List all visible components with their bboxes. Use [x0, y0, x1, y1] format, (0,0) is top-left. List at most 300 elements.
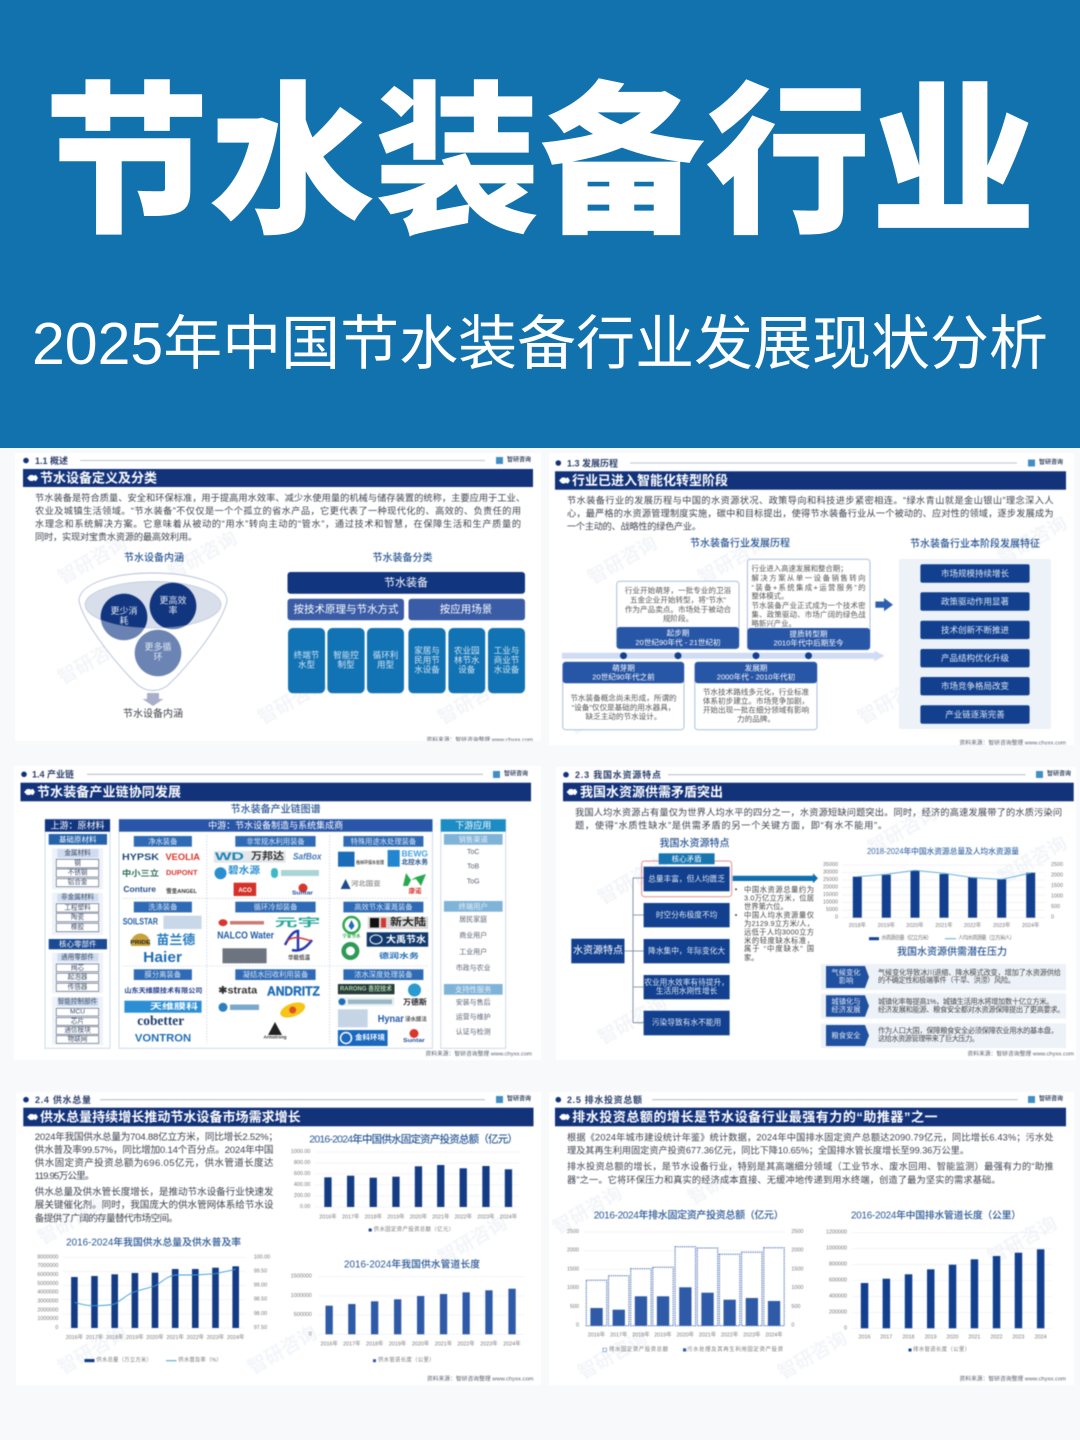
chart: supply volume and rate: 98.50	[254, 1297, 267, 1303]
chart: supply volume and rate: 2019年	[126, 1333, 144, 1341]
callout text: 中国水资源总量约为	[744, 885, 814, 894]
chart: supply volume and rate: 4000000	[37, 1290, 58, 1296]
chart: drainage pipeline length: 排水管道长度（公里）	[913, 1345, 970, 1353]
chart: supply volume and rate: 99.00	[254, 1283, 267, 1289]
chart: supply volume and rate: 1000000	[37, 1316, 58, 1322]
callout text: 3.0万亿立方米，位居	[744, 894, 814, 902]
stage: 起步期: 规阶段。	[663, 613, 693, 623]
column: upstream: 核心零部件	[59, 939, 97, 949]
characteristics tree	[571, 853, 732, 1035]
chart: drainage investment: 0	[576, 1323, 579, 1329]
chart: water resources: 0	[835, 915, 838, 921]
chart: drainage investment: 排水固定资产投资总额	[609, 1345, 669, 1353]
pressure rows: 的不确定性和极端事件（干旱、洪涝）风险。	[878, 976, 1015, 984]
chart: drainage pipeline length: 0	[844, 1325, 847, 1331]
column: upstream: 通用零部件	[61, 952, 94, 961]
chart: water resources: 2019年	[878, 921, 896, 929]
panel: 1.3 development history: 智研咨询	[994, 512, 1071, 569]
features list: 政策驱动作用显著	[941, 596, 1009, 606]
column: upstream: 基础原材料	[59, 834, 97, 844]
classification tree: 智能控	[333, 650, 359, 660]
stage: 萌芽期: 萌芽期	[612, 662, 635, 672]
pressure rows: 影响	[839, 976, 853, 985]
chart: drainage investment: 2020年	[677, 1331, 695, 1339]
sub-categories	[134, 836, 423, 980]
body text: 一个主动的、战略性的绿色产业。	[567, 521, 701, 532]
section label: 2.5 排水投资总额	[567, 1094, 642, 1105]
stage: 提质转型期: 2010年代中后期至今	[773, 638, 844, 648]
company logos: 新大陆	[390, 916, 426, 928]
chart: supply pipeline length: 1500000	[291, 1274, 312, 1280]
chart: supply pipeline length: 2016-2024年我国供水管道长度	[344, 1258, 480, 1270]
chart: drainage investment	[567, 1208, 803, 1353]
chart: drainage pipeline length: 2020	[946, 1334, 958, 1340]
chart: drainage investment: 2019年	[654, 1331, 672, 1339]
company logos: BEWG	[402, 850, 428, 858]
company logos: NALCO Water	[217, 930, 274, 942]
panel: 1.3 development history: 智研咨询	[694, 532, 771, 589]
section label: 2.4 供水总量	[35, 1094, 91, 1105]
funnel diagram: 更少消	[110, 605, 138, 616]
logo	[496, 1095, 531, 1103]
chart: supply volume and rate: 5000000	[37, 1281, 58, 1287]
source: 资料来源：智研咨询整理 www.chyxx.com	[967, 1050, 1074, 1058]
source: 资料来源：智研咨询整理 www.chyxx.com	[426, 736, 533, 744]
column: downstream: ToB	[467, 864, 480, 870]
chart: supply pipeline length	[291, 1258, 524, 1364]
panel: 2.3 water resources	[556, 767, 1076, 1060]
company logos: 雪圣ANGEL	[166, 887, 198, 895]
column: upstream	[45, 819, 110, 1048]
chart: water resources: 2021年	[935, 921, 953, 929]
title bar: 我国水资源供需矛盾突出	[580, 784, 723, 800]
stage: 起步期: 行业开始萌芽，一批专业的卫浴	[625, 585, 732, 595]
chart: supply volume and rate: 2020年	[146, 1333, 164, 1341]
callout text	[735, 885, 815, 962]
section label	[23, 1094, 485, 1105]
company logos: Suntar	[403, 1038, 426, 1044]
company logos: ANDRITZ	[267, 985, 320, 999]
company logos	[122, 850, 429, 1046]
chart: drainage investment: 2022年	[721, 1331, 739, 1339]
chart: water resources: 2022年	[964, 921, 982, 929]
chart: water resources: 2023年	[993, 921, 1011, 929]
company logos: WD	[215, 851, 244, 863]
pressure rows: 作为人口大国，保障粮食安全必须保障农业用水的基本盘，	[878, 1026, 1058, 1035]
company logos: SOILSTAR	[123, 917, 158, 927]
company logos: 河北国亚	[351, 878, 381, 888]
column: downstream: ToC	[467, 849, 479, 856]
column: downstream: 销售渠道	[459, 835, 488, 844]
logo: 智研咨询	[504, 769, 528, 777]
body text: 我国人均水资源占有量仅为世界人均水平的四分之一，水资源短缺问题突出。同时，经济的高速发展带了的水质污染问	[575, 806, 1062, 817]
chart: supply volume and rate: 2016-2024年我国供水总量及供水普及率	[66, 1236, 241, 1248]
title bar: 排水投资总额的增长是节水设备行业最强有力的“助推器”之一	[572, 1110, 938, 1124]
chart: supply volume and rate: 供水总量（万立方米）	[96, 1356, 152, 1364]
body text	[575, 806, 1062, 830]
panel: 2.5 drainage investment: 智研咨询	[984, 1212, 1061, 1269]
classification tree: 设备	[458, 664, 476, 674]
chart: fixed asset investment: 2021年	[432, 1212, 450, 1220]
company logos: 北控水务	[402, 857, 429, 866]
stage: 提质转型期	[747, 559, 870, 650]
column: upstream: 不锈钢	[68, 868, 88, 876]
section label	[556, 458, 1017, 468]
company logos: DUPONT	[166, 868, 198, 877]
title bar	[555, 1108, 1066, 1126]
chart: supply volume and rate: 2018年	[106, 1333, 124, 1341]
stage: 萌芽期: 缺乏主动的节水设计。	[586, 711, 661, 721]
company logos: 浸水膜法	[405, 1015, 427, 1023]
stage: 提质转型期: 节水装备产业正式成为一个技术密	[752, 601, 866, 610]
body text: 节水装备是符合质量、安全和环保标准，用于提高用水效率、减少水使用量的机械与储存装置的统称，主要应用于工业、	[35, 492, 525, 503]
chart: drainage investment: 2023年	[743, 1331, 761, 1339]
chart: drainage pipeline length: 1000000	[826, 1246, 847, 1252]
company logos: Conture	[123, 885, 157, 894]
panel: 1.3 development history: 智研咨询	[854, 672, 931, 729]
company logos: 中小三立	[122, 868, 159, 878]
body text	[567, 495, 1054, 532]
chart: supply volume and rate: 2000000	[37, 1307, 58, 1313]
chart: fixed asset investment: 2018年	[365, 1212, 383, 1220]
classification tree: 用型	[377, 660, 394, 670]
title bar	[23, 1108, 534, 1126]
chart: drainage investment: 2000	[567, 1248, 579, 1254]
chart: drainage investment: 2016年	[588, 1331, 606, 1339]
panel: 2.5 drainage investment: 智研咨询	[549, 1182, 626, 1239]
company logos: 天维膜科	[150, 1001, 198, 1011]
source: 资料来源：智研咨询整理 www.chyxx.com	[959, 738, 1066, 746]
chart: drainage investment: 1000	[567, 1285, 579, 1291]
column: upstream: 芯片	[71, 1016, 84, 1025]
chart: drainage investment: 2021年	[699, 1331, 717, 1339]
chart: drainage pipeline length: 800000	[829, 1262, 847, 1268]
column: upstream: 物联网	[68, 1034, 88, 1043]
logo: 智研咨询	[507, 456, 531, 464]
chart: water resources: 500	[1051, 904, 1060, 910]
timeline dots	[620, 652, 812, 659]
chart: fixed asset investment: 400.00	[294, 1182, 310, 1188]
characteristics tree: 总量丰富，但人均匮乏	[648, 874, 725, 884]
features list: 市场竞争格局改变	[941, 681, 1009, 691]
chart: drainage investment: 500	[570, 1304, 579, 1310]
chart: fixed asset investment: 1000.00	[291, 1149, 310, 1155]
panel: 2.3 water resources: 智研咨询	[594, 852, 671, 909]
company logos: VEOLIA	[166, 852, 201, 862]
column: upstream: 传感器	[68, 982, 88, 991]
section label	[23, 455, 485, 466]
company logos: Hynar	[378, 1014, 404, 1025]
sub-categories: 高效节水灌溉装备	[354, 902, 413, 912]
company logos: 万邦达	[251, 850, 284, 862]
chart: supply pipeline length: 500000	[294, 1312, 312, 1318]
chart: supply volume and rate: 供水普及率（%）	[178, 1356, 222, 1364]
chart: drainage pipeline length	[826, 1208, 1052, 1353]
chart: supply pipeline length: 2024年	[503, 1339, 521, 1347]
logo	[496, 456, 531, 464]
stage: 发展期: 节水技术路线多元化，行业标准	[703, 686, 810, 696]
body text: 水理念和系统解决方案。它意味着从被动的“用水”转向主动的“管水”，通过技术和智慧，在保障生活和生产质量的	[35, 518, 521, 529]
column: upstream: MCU	[70, 1009, 85, 1016]
chart: drainage pipeline length: 1200000	[826, 1230, 847, 1236]
column: upstream: 通信模块	[64, 1025, 91, 1034]
body text: 根据《2024年城市建设统计年鉴》统计数据，2024年中国排水固定资产总额达2090.79亿元，同比增长6.43%；污水处	[567, 1131, 1054, 1142]
logo: 智研咨询	[1039, 458, 1063, 466]
pressure rows: 这给水资源管理带来了巨大压力。	[878, 1034, 979, 1043]
chart: fixed asset investment: 2017年	[342, 1212, 360, 1220]
column: downstream: 认证与检测	[456, 1027, 491, 1036]
chart: fixed asset investment: 2019年	[387, 1212, 405, 1220]
body text: 供水固定资产投资总额为696.05亿元，供水管道长度达	[35, 1157, 274, 1169]
heading: pressure: 我国水资源供需潜在压力	[897, 945, 1007, 958]
chart: water resources: 2020年	[906, 921, 924, 929]
chart: supply pipeline length: 2023年	[480, 1339, 498, 1347]
panel: 2.5 drainage investment: 智研咨询	[774, 1327, 851, 1384]
chart: drainage investment: 0	[791, 1323, 794, 1329]
sub-categories: 净水装备	[148, 837, 178, 846]
title bar: 供水总量持续增长推动节水设备市场需求增长	[40, 1110, 301, 1124]
body text: 展关键催化剂。同时，我国庞大的供水管网体系给节水设	[35, 1199, 274, 1211]
sub-categories: 循环冷却装备	[254, 902, 298, 912]
chart: supply volume and rate: 2024年	[227, 1333, 245, 1341]
panel: 2.4 water supply: 智研咨询	[244, 1322, 321, 1379]
chart: drainage pipeline length: 2016-2024年中国排水管道长度（公里）	[851, 1208, 1021, 1222]
classification tree: 按技术原理与节水方式	[294, 602, 399, 616]
body text: 供水普及率99.57%，同比增加0.14个百分点。2024年中国	[35, 1144, 273, 1156]
column: upstream: 智能控制部件	[58, 996, 98, 1005]
logo	[1028, 458, 1063, 466]
company logos: cobetter	[137, 1014, 184, 1029]
chart: drainage pipeline length: 2019	[925, 1334, 937, 1340]
subtitle: 2025年中国节水装备行业发展现状分析	[32, 311, 1048, 377]
section label: 1.1 概述	[35, 455, 68, 466]
funnel diagram: 更多循	[144, 641, 172, 652]
funnel diagram	[79, 573, 227, 690]
chart: fixed asset investment: 800.00	[294, 1160, 310, 1166]
column: downstream: 工业用户	[459, 947, 487, 956]
title bar	[563, 783, 1074, 801]
characteristics tree: 生活用水刚性增长	[656, 986, 718, 996]
chart: supply volume and rate: 2017年	[86, 1333, 104, 1341]
panel: 1.1 overview: 智研咨询	[54, 532, 131, 589]
classification tree: 终端节	[294, 650, 320, 660]
logo: 智研咨询	[507, 1095, 531, 1103]
column: upstream: 橡胶	[71, 922, 84, 931]
chart: water resources: 1000	[1051, 894, 1063, 900]
body text: 供水总量及供水管长度增长，是推动节水设备行业快速发	[35, 1186, 274, 1198]
panel: 1.1 overview: 智研咨询	[254, 672, 331, 729]
chart: fixed asset investment: 2024年	[500, 1212, 518, 1220]
column: downstream: 安装与售后	[456, 998, 491, 1006]
features list: 技术创新不断推进	[941, 625, 1009, 635]
body text: 节水装备行业的发展历程与中国的水资源状况、政策导向和科技进步紧密相连。“绿水青山就是金山银山”理念深入人	[567, 495, 1054, 506]
source: 资料来源：智研咨询整理 www.chyxx.com	[425, 1050, 532, 1058]
body text: 题，使得“水质性缺水”是供需矛盾的另一个关键方面，即“有水不能用”。	[575, 819, 887, 830]
body text: 理及其再生利用固定资产投资677.36亿元，同比下降10.65%；全国排水管长度增长至99.36万公里。	[567, 1144, 969, 1155]
company logos: 山东天维膜技术有限公司	[124, 986, 202, 994]
stage: 提质转型期: 集、政策驱动、市场广阔的绿色战	[752, 610, 866, 619]
chart: supply volume and rate: 8000000	[37, 1254, 58, 1260]
title bar: 节水装备产业链协同发展	[37, 784, 181, 800]
body text: 2024年我国供水总量为704.88亿立方米，同比增长2.52%；	[35, 1131, 278, 1143]
chart: supply volume and rate	[37, 1236, 270, 1364]
stage: 起步期: 起步期	[667, 628, 690, 638]
chart: drainage investment: 污水处理及其再生利用固定资产投资	[687, 1345, 784, 1353]
company logos: ✱strata	[218, 986, 258, 996]
callout text: 米的轻度缺水标准，	[744, 936, 814, 945]
chart: fixed asset investment: 2016年	[319, 1212, 337, 1220]
chart: supply volume and rate: 2021年	[167, 1333, 184, 1341]
stage: 提质转型期: 略新兴产业。	[752, 619, 796, 628]
chart: fixed asset investment	[291, 1132, 520, 1233]
column: downstream: 下游应用	[455, 820, 491, 830]
company logos: HYPSK	[122, 852, 160, 862]
panel: 1.3 development history	[549, 453, 1074, 746]
panel: 1.1 overview: 智研咨询	[434, 672, 511, 729]
pressure rows: 城镇化率每提高1%，城镇生活用水将增加数十亿立方米。	[878, 997, 1054, 1006]
chart: drainage pipeline length: 400000	[829, 1293, 847, 1299]
chart: supply pipeline length: 2019年	[389, 1339, 407, 1347]
chart: fixed asset investment: 2016-2024年中国供水固定资产投资总额（亿元）	[309, 1132, 518, 1145]
classification tree: 水型	[298, 660, 315, 670]
classification tree: 水设备	[494, 664, 520, 674]
company logos: 碧水源	[228, 864, 261, 876]
stage: 发展期: 力的品牌。	[737, 714, 775, 724]
heading: features: 节水装备行业本阶段发展特征	[910, 537, 1040, 550]
chart: supply volume and rate: 3000000	[37, 1298, 58, 1304]
features list: 产品结构优化升级	[941, 653, 1009, 663]
classification tree: 按应用场景	[440, 602, 492, 616]
chart: supply volume and rate: 2023年	[207, 1333, 225, 1341]
classification tree: 商业节	[494, 655, 520, 665]
company logos: 格林环保水处理	[356, 859, 384, 866]
stage: 提质转型期: “装备+系统集成+运营服务”的	[752, 583, 866, 592]
chart: supply volume and rate: 99.50	[254, 1268, 267, 1274]
chart: supply pipeline length: 2020年	[412, 1339, 430, 1347]
section label	[563, 769, 1026, 780]
column: midstream: 中游：节水设备制造与系统集成商	[208, 820, 343, 830]
panel: 1.1 overview: 智研咨询	[164, 527, 241, 584]
stage: 萌芽期	[563, 662, 684, 730]
source: 资料来源：智研咨询整理 www.chyxx.com	[959, 1375, 1066, 1383]
characteristics tree: 水资源特点	[573, 944, 623, 956]
chart: water resources: 25000	[823, 877, 838, 883]
callout text: 为2129.9立方米/人，	[744, 919, 814, 928]
chart: drainage pipeline length: 2016	[858, 1334, 870, 1340]
chart: supply pipeline length: 2018年	[366, 1339, 384, 1347]
logo	[1036, 770, 1071, 778]
stage: 起步期: 五金企业开始转型，将“节水”	[630, 594, 727, 604]
chart: fixed asset investment: 200.00	[294, 1193, 310, 1199]
company logos: VONTRON	[135, 1033, 191, 1045]
column: upstream: 阀芯	[71, 962, 84, 971]
section label: 1.3 发展历程	[567, 458, 618, 468]
characteristics tree: 降水集中，年际变化大	[648, 946, 725, 956]
body text: 农业及城镇生活领域。“节水装备”不仅仅是一个个孤立的省水产品，它更代表了一种现代化的、高效的、负责任的用	[35, 505, 521, 516]
pressure rows: 粮食安全	[831, 1031, 861, 1040]
funnel diagram: 环	[153, 652, 163, 662]
funnel diagram: 耗	[119, 616, 129, 626]
main title: 节水装备行业	[44, 72, 1036, 254]
title bar: 节水设备定义及分类	[40, 470, 157, 486]
panel: 1.3 development history: 智研咨询	[564, 682, 641, 739]
section label	[556, 1094, 1018, 1105]
body text: 器”之一。它将环保压力和真实的经济成本直接、无缓冲地传递到用水终端，创造了最为坚实的需求基础。	[567, 1174, 1001, 1185]
title bar	[20, 783, 531, 801]
company logos: SafBox	[293, 852, 322, 862]
stage: 起步期	[617, 581, 739, 649]
panel: 2.4 water supply: 智研咨询	[434, 1212, 511, 1269]
panel: 2.4 water supply	[16, 1092, 541, 1385]
column: upstream: 金属材料	[64, 848, 91, 857]
funnel diagram: 率	[168, 604, 178, 616]
chart: drainage pipeline length: 2017	[880, 1334, 892, 1340]
chart: water resources: 0	[1051, 915, 1054, 921]
company logos: 宁夏节水	[342, 932, 361, 940]
chart: supply volume and rate: 2022年	[187, 1333, 205, 1341]
column: upstream: 工程塑料	[64, 902, 91, 911]
company logos: RARONG 喜控技术	[340, 984, 392, 993]
chart: drainage investment: 2018年	[632, 1331, 650, 1339]
chart: drainage pipeline length: 2023	[1012, 1334, 1024, 1340]
header banner	[0, 0, 1080, 448]
characteristics tree: 时空分布极度不均	[656, 910, 718, 920]
body text: 备提供了广阔的存量替代市场空间。	[35, 1212, 178, 1224]
chart: water resources: 1500	[1051, 883, 1063, 889]
classification tree: 家居与	[414, 646, 440, 656]
chart: supply pipeline length: 供水管道长度（公里）	[378, 1356, 434, 1364]
classification tree: 循环利	[373, 650, 398, 660]
pressure rows: 气候变化	[831, 968, 861, 977]
features list: 产业链逐渐完善	[945, 710, 1005, 720]
arrow	[142, 693, 164, 706]
section label: 1.4 产业链	[32, 768, 74, 780]
classification tree: 农业园	[454, 646, 480, 656]
heading: classification: 节水装备分类	[372, 551, 432, 564]
funnel caption: 节水设备内涵	[123, 707, 183, 720]
pressure rows	[821, 964, 1066, 1048]
classification tree: 民用节	[414, 655, 440, 665]
chart: water resources	[823, 846, 1063, 942]
chart: fixed asset investment: 0.00	[300, 1204, 310, 1210]
company logos: 大禹节水	[386, 934, 426, 944]
funnel diagram: 更高效	[159, 594, 187, 606]
callout text: 中国人均水资源量仅	[744, 910, 815, 920]
classification tree: 工业与	[494, 646, 519, 656]
panel: 2.5 drainage investment	[549, 1092, 1074, 1385]
chart: water resources: 20000	[823, 885, 838, 891]
stage: 发展期: 开始出现一批在细分领域有影响	[703, 704, 810, 714]
column: upstream: 陶瓷	[71, 912, 84, 921]
callout text: 远低于人均3000立方	[744, 928, 814, 936]
chart: supply volume and rate: 100.00	[254, 1254, 270, 1260]
stage: 提质转型期: 整体模式。	[752, 592, 788, 600]
company logos: Armstrong	[263, 1034, 287, 1040]
panel: 2.3 water resources: 智研咨询	[994, 832, 1071, 889]
chart: water resources: 2000	[1051, 872, 1063, 878]
title bar	[555, 471, 1066, 490]
chart: supply pipeline length: 2021年	[435, 1339, 453, 1347]
chart: water resources: 35000	[823, 862, 838, 868]
callout text: 家。	[744, 953, 759, 962]
heading: history: 节水装备行业发展历程	[690, 536, 790, 550]
chart: drainage investment: 500	[791, 1304, 800, 1310]
stage: 起步期: 作为产品卖点。市场处于被动合	[625, 604, 732, 614]
stage: 提质转型期: 行业进入高速发展和整合期；	[752, 564, 848, 573]
chart: drainage pipeline length: 2021	[968, 1334, 980, 1340]
column: downstream: 支持性服务	[455, 985, 491, 994]
chart: drainage pipeline length: 2022	[990, 1334, 1002, 1340]
